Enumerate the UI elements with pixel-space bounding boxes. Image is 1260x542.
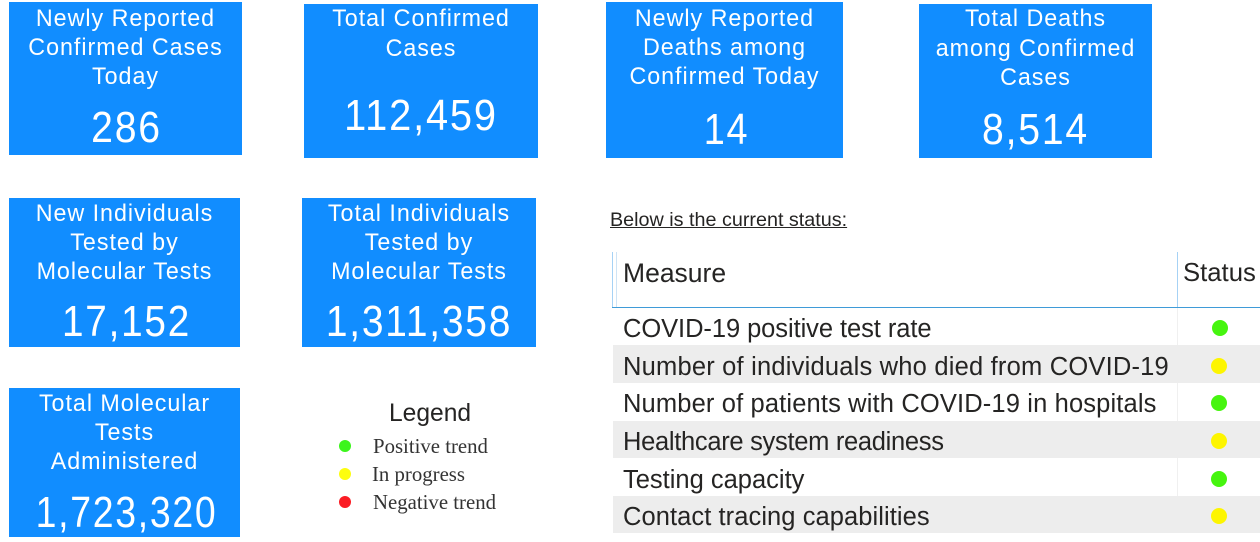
card: total deaths: among Confirmed (936, 35, 1135, 62)
card: total molecular tests: Total Molecular (39, 390, 210, 417)
card: total individuals tested: Total Individuals (328, 200, 510, 227)
status dot (1211, 395, 1227, 411)
status dot (1211, 358, 1227, 374)
card: total confirmed cases: Cases (386, 35, 456, 62)
card: total confirmed cases (304, 4, 538, 158)
status dot (1212, 320, 1228, 336)
status table (612, 252, 1260, 533)
card: total individuals tested: Tested by (365, 229, 473, 256)
status dot (1211, 433, 1227, 449)
card: newly reported confirmed cases: Confirmed Cases (28, 34, 223, 61)
row: positive test rate: COVID-19 positive test rate (623, 315, 931, 343)
status dot (1211, 471, 1227, 487)
legend heading: Legend (389, 400, 471, 427)
status dot (1211, 508, 1227, 524)
card: total individuals tested: 1,311,358 (326, 297, 512, 346)
card: total deaths (919, 4, 1152, 158)
card: newly reported deaths: 14 (704, 105, 749, 154)
card: newly reported deaths: Newly Reported (635, 5, 814, 32)
card: newly reported confirmed cases (9, 2, 242, 155)
card: newly reported deaths (606, 2, 843, 158)
card: new individuals tested: Tested by (70, 229, 179, 256)
row: contact tracing: Contact tracing capabilities (623, 503, 930, 531)
card: newly reported deaths: Deaths among (643, 34, 806, 61)
card: newly reported confirmed cases: Today (92, 63, 159, 90)
card: total confirmed cases: Total Confirmed (332, 5, 510, 32)
legend: negative trend: Negative trend (373, 491, 496, 514)
card: total confirmed cases: 112,459 (344, 91, 498, 140)
legend: positive trend: Positive trend (373, 435, 488, 458)
card: new individuals tested: 17,152 (62, 297, 191, 346)
card: total molecular tests: 1,723,320 (36, 488, 217, 537)
legend (339, 400, 496, 514)
row: hospital patients: Number of patients with COVID-19 in hospitals (623, 390, 1157, 418)
card: total deaths: Cases (1000, 64, 1071, 91)
card: total individuals tested: Molecular Tests (331, 258, 507, 285)
table intro text: Below is the current status: (610, 209, 847, 231)
table header: measure: Measure (623, 258, 726, 288)
card: new individuals tested (9, 198, 240, 347)
card: newly reported confirmed cases: 286 (91, 103, 162, 152)
card: total molecular tests (9, 388, 240, 537)
card: total molecular tests: Administered (51, 448, 198, 475)
legend: in progress: In progress (372, 463, 465, 486)
card: newly reported confirmed cases: Newly Reported (36, 5, 215, 32)
table header: status: Status (1183, 259, 1256, 287)
card: total deaths: 8,514 (982, 105, 1089, 154)
row: testing capacity: Testing capacity (623, 466, 804, 494)
card: newly reported deaths: Confirmed Today (629, 63, 820, 90)
card: new individuals tested: Molecular Tests (37, 258, 212, 285)
row: deaths: Number of individuals who died from COVID-19 (623, 353, 1169, 381)
card: total molecular tests: Tests (95, 419, 154, 446)
card: new individuals tested: New Individuals (36, 200, 213, 227)
row: healthcare readiness: Healthcare system readiness (623, 428, 944, 456)
card: total individuals tested (302, 198, 536, 347)
card: total deaths: Total Deaths (965, 5, 1106, 32)
